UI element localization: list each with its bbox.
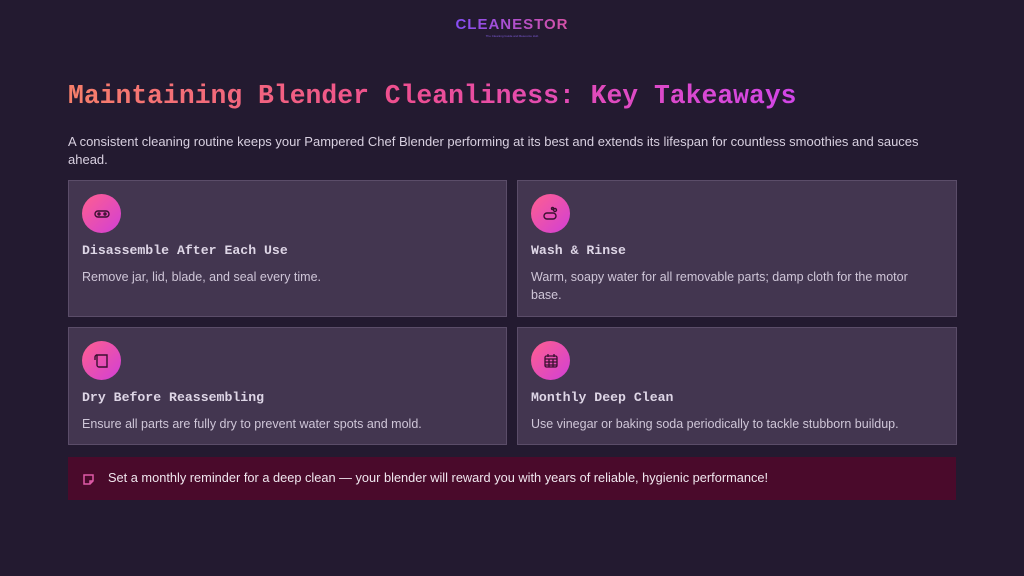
icon: towel	[82, 341, 121, 380]
card: wash: Wash & Rinse	[531, 243, 626, 258]
card: dry	[68, 327, 507, 445]
title: Maintaining Blender Cleanliness: Key Takeaways	[68, 81, 797, 111]
card: disassemble: Remove jar, lid, blade, and seal every time.	[82, 270, 321, 284]
callout	[68, 457, 956, 500]
card: disassemble: Disassemble After Each Use	[82, 243, 288, 258]
icon: link	[82, 194, 121, 233]
card: dry: Ensure all parts are fully dry to prevent water spots and mold.	[82, 417, 422, 431]
card: disassemble	[68, 180, 507, 317]
card: wash: Warm, soapy water for all removable parts; damp cloth for the motor base.	[531, 270, 908, 302]
icon: soap	[531, 194, 570, 233]
callout: Set a monthly reminder for a deep clean — your blender will reward you with years of reliable, hygienic performance!	[108, 470, 768, 485]
card: dry: Dry Before Reassembling	[82, 390, 264, 405]
intro text: A consistent cleaning routine keeps your Pampered Chef Blender performing at its best and extends its lifespan for countless smoothies and sauces ahead.	[68, 134, 919, 167]
card: monthly	[517, 327, 957, 445]
card: monthly: Monthly Deep Clean	[531, 390, 673, 405]
card: monthly: Use vinegar or baking soda periodically to tackle stubborn buildup.	[531, 417, 899, 431]
card: wash	[517, 180, 957, 317]
icon: note	[83, 474, 94, 485]
logo: CLEANESTOR	[455, 16, 569, 33]
logo: The Cleaning Guide and Resource Hub	[486, 34, 538, 38]
icon: calendar	[531, 341, 570, 380]
